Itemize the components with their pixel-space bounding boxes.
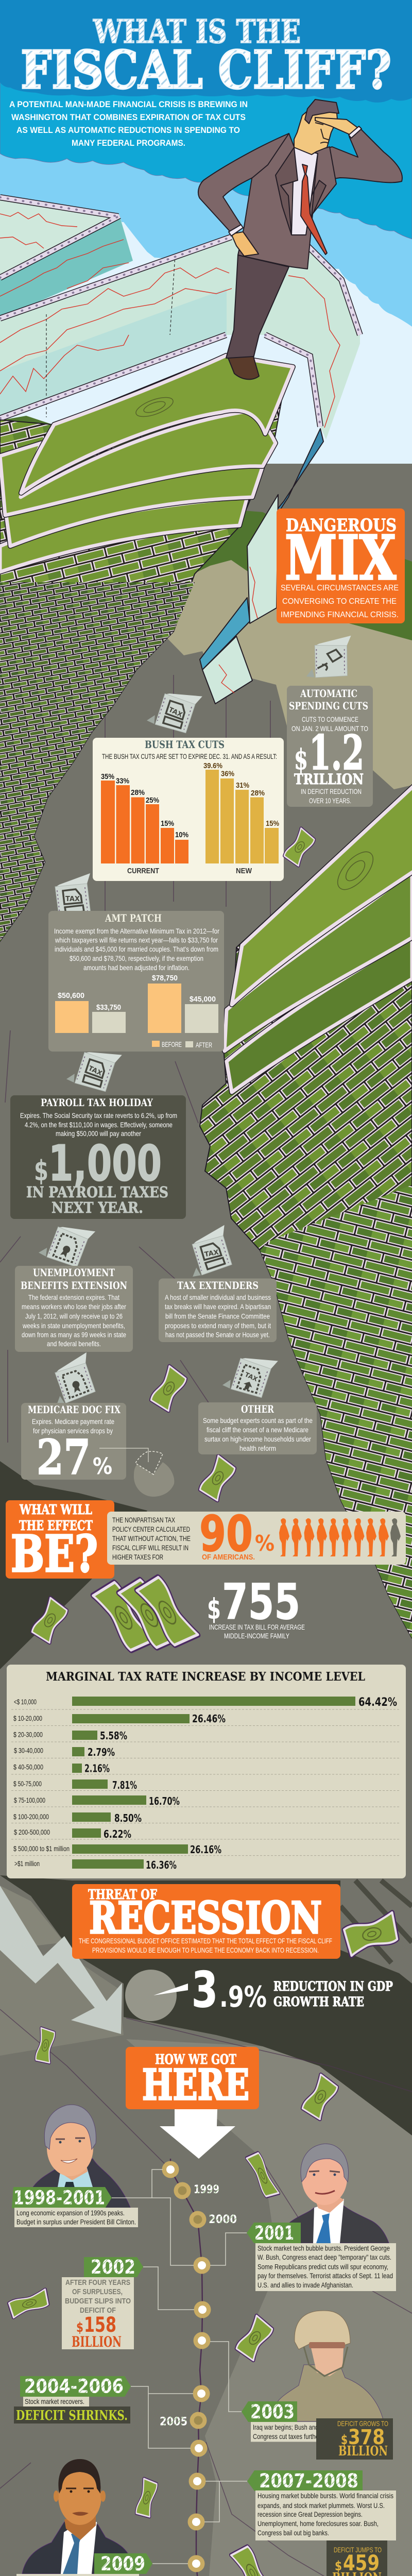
- panel: automatic spending cuts: SPENDING CUTS: [289, 700, 368, 712]
- legend: [152, 1040, 212, 1049]
- icon: tax paper 2: TAX: [65, 895, 80, 903]
- panel: automatic spending cuts: TRILLION: [294, 771, 364, 788]
- panel: automatic spending cuts: $: [294, 743, 308, 776]
- panel: medicare doc fix: 27: [37, 1429, 91, 1485]
- timeline entry: 2004-2006: Stock market recovers.: [25, 2397, 84, 2405]
- new rates labels: 31%: [236, 781, 249, 790]
- panel: unemployment benefits: down from as many as 99 weeks in state: [22, 1330, 126, 1338]
- sky: [0, 0, 412, 464]
- timeline entry: 1998-2001: Long economic expansion of 1990s peaks.: [16, 2209, 125, 2217]
- rate values: [84, 1696, 397, 1871]
- panel: dangerous mix: [277, 509, 405, 623]
- intro text: AS WELL AS AUTOMATIC REDUCTIONS IN SPENDING TO: [16, 125, 240, 135]
- current rates labels: 35%: [101, 772, 114, 781]
- new rates labels: 15%: [266, 819, 279, 828]
- panel: tax extenders: proposes to extend many of them, but it: [165, 1321, 271, 1330]
- panel: dangerous mix: SEVERAL CIRCUMSTANCES ARE: [281, 584, 399, 592]
- shielding hand: [315, 117, 358, 134]
- timeline entry: 2002: DEFICIT OF: [80, 2306, 116, 2315]
- panel: automatic spending cuts: ON JAN. 2 WILL AMOUNT TO: [291, 724, 368, 733]
- bars: [72, 1697, 355, 1869]
- illustration: businessman looking out: [198, 99, 402, 379]
- panel: marginal tax rate chart: MARGINAL TAX RATE INCREASE BY INCOME LEVEL: [46, 1670, 365, 1684]
- panel: medicare doc fix: for physician services drops by: [33, 1427, 113, 1435]
- AMT bar chart: $45,000: [190, 995, 216, 1004]
- timeline entry: 2003: Congress cut taxes further.: [253, 2432, 322, 2441]
- panel: 90 percent of americans: %: [255, 1531, 274, 1556]
- callout: 755 dollars: 755: [222, 1574, 300, 1631]
- axis labels: CURRENT: [127, 867, 159, 875]
- panel: payroll tax holiday: PAYROLL TAX HOLIDAY: [41, 1096, 153, 1109]
- panel: 90 percent of americans: THE NONPARTISAN TAX: [112, 1516, 176, 1524]
- panel: AMT patch: amounts had been adjusted for inflation.: [83, 963, 190, 972]
- callout: 755 dollars: $: [207, 1592, 221, 1625]
- panel: payroll tax holiday: $: [34, 1155, 48, 1187]
- timeline entry: 2007-2008: 459: [343, 2550, 380, 2575]
- panel: payroll tax holiday: IN PAYROLL TAXES: [26, 1183, 168, 1201]
- timeline entry: 2004-2006: DEFICIT SHRINKS.: [16, 2408, 128, 2424]
- timeline entry: 2007-2008: expands, and stock market plummets. Worst U.S.: [258, 2501, 385, 2510]
- new rates labels: [203, 761, 279, 828]
- icon: medal paper 1: [39, 1213, 96, 1272]
- panel: other: [198, 1402, 317, 1454]
- rate values: 16.36%: [146, 1859, 177, 1871]
- panel: tax extenders: [159, 1279, 277, 1342]
- current rates labels: 15%: [161, 819, 174, 828]
- dark rock upper region: [0, 1461, 147, 1669]
- panel: unemployment benefits: [15, 1266, 133, 1352]
- icon: other tax paper: [222, 1344, 279, 1402]
- panel: AMT patch: AMT PATCH: [105, 912, 162, 924]
- panel: tax extenders: A host of smaller individual and business: [165, 1293, 271, 1301]
- timeline entry: 2002: BUDGET SLIPS INTO: [65, 2297, 131, 2306]
- icon: tax paper 1: TAX: [167, 706, 183, 719]
- timeline entry: 2003: 2003: [250, 2401, 295, 2423]
- heading: what will the effect be: THE EFFECT: [19, 1518, 93, 1534]
- timeline entry: 2007-2008: $: [335, 2558, 342, 2574]
- heading: how we got here: HOW WE GOT: [155, 2052, 236, 2067]
- panel: unemployment benefits: weeks in state unemployment benefits,: [22, 1321, 125, 1330]
- current rates labels: 25%: [146, 796, 159, 805]
- legend: BEFORE: [162, 1040, 182, 1048]
- timeline entry: 2004-2006: 2004-2006: [24, 2375, 124, 2398]
- intro text: WASHINGTON THAT COMBINES EXPIRATION OF TAX CUTS: [11, 112, 246, 122]
- new rates labels: 36%: [221, 770, 234, 778]
- portrait: George W. Bush: [289, 2144, 389, 2243]
- green and tan hills: [0, 416, 412, 804]
- chart: 27 percent pie: [99, 1448, 174, 1497]
- panel: unemployment benefits: July 1, 2012, will only receive up to 26: [25, 1312, 123, 1320]
- current rates labels: [101, 772, 188, 839]
- portrait: soldier: [270, 2311, 384, 2421]
- income labels: [13, 1698, 70, 1868]
- icon: flying bill: [343, 1912, 401, 1956]
- income labels: $ 500,000 to $1 million: [13, 1844, 70, 1853]
- AMT bar chart: $33,750: [96, 1003, 121, 1012]
- income labels: $ 10-20,000: [13, 1714, 42, 1722]
- timeline medallions: [162, 2161, 232, 2576]
- panel: payroll tax holiday: 4.2%, on the first $110,100 in wages. Effectively, someone: [25, 1121, 173, 1129]
- timeline year labels: 2005: [160, 2415, 187, 2429]
- panel: bush tax cuts chart: BUSH TAX CUTS: [145, 738, 225, 751]
- timeline entry: 2007-2008: Unemployment, home foreclosures soar. Bush,: [258, 2519, 379, 2528]
- panel: tax extenders: TAX EXTENDERS: [177, 1279, 259, 1292]
- icon: tax paper 3: TAX: [87, 1064, 103, 1078]
- lapels: [276, 147, 326, 235]
- panel: threat of recession: THREAT OF: [88, 1887, 157, 1903]
- tie: [301, 164, 327, 255]
- rate values: 8.50%: [114, 1812, 142, 1824]
- current rates bars: [101, 781, 188, 863]
- rate values: 2.16%: [84, 1762, 110, 1774]
- heading: what will the effect be: [6, 1500, 114, 1583]
- panel: automatic spending cuts: AUTOMATIC: [300, 687, 357, 700]
- panel: payroll tax holiday: 1,000: [48, 1136, 162, 1192]
- timeline entry: 2003: [242, 2401, 393, 2460]
- panel: AMT patch: individuals and $45,000 for married couples. That's down from: [55, 945, 218, 953]
- timeline entry: 2001: U.S. and allies to invade Afghanistan.: [258, 2281, 353, 2289]
- timeline entry: 2002: $: [76, 2320, 83, 2335]
- intro text: MANY FEDERAL PROGRAMS.: [72, 138, 185, 148]
- cracks: [0, 675, 412, 2576]
- left arm: [198, 133, 289, 233]
- timeline entry: 2009: 2009: [100, 2553, 145, 2575]
- callout: 755 dollars: MIDDLE-INCOME FAMILY: [224, 1632, 290, 1640]
- title: WHAT IS THE: [93, 12, 301, 50]
- panel: 90 percent of americans: 90: [199, 1506, 253, 1563]
- illustration: stack of money: [0, 354, 293, 941]
- panel: medicare doc fix: %: [93, 1453, 112, 1480]
- panel: bush tax cuts chart: THE BUSH TAX CUTS ARE SET TO EXPIRE DEC. 31. AND AS A RESULT:: [102, 752, 277, 760]
- right arm: [322, 128, 402, 182]
- timeline entry: 2003: Iraq war begins; Bush and: [253, 2423, 318, 2431]
- panel: 90 percent of americans: POLICY CENTER CALCULATED: [112, 1525, 190, 1533]
- income labels: $ 20-30,000: [13, 1730, 43, 1738]
- panel: threat of recession: [72, 1884, 340, 1959]
- timeline entry: 2001: 2001: [254, 2222, 294, 2244]
- income labels: <$ 10,000: [14, 1698, 37, 1706]
- arrow: down to timeline: [160, 2109, 235, 2159]
- illustration: stock chart paper tape: [0, 196, 360, 704]
- panel: 90 percent of americans: OF AMERICANS.: [202, 1553, 255, 1562]
- timeline entry: 1998-2001: 1998-2001: [13, 2187, 105, 2209]
- axis labels: NEW: [236, 867, 252, 875]
- illustration: right money stack: [200, 785, 412, 1638]
- panel: 90 percent of americans: HIGHER TAXES FOR: [112, 1553, 163, 1561]
- heading: what will the effect be: BE?: [11, 1524, 98, 1583]
- panel: medicare doc fix: [21, 1403, 126, 1485]
- panel: medicare doc fix: MEDICARE DOC FIX: [28, 1403, 121, 1416]
- rate values: 5.58%: [100, 1730, 127, 1742]
- portrait: Bill Clinton: [31, 2105, 131, 2210]
- panel: dangerous mix: CONVERGING TO CREATE THE: [282, 597, 397, 606]
- chart: GDP pie with 3.9 percent: 3: [192, 1962, 218, 2019]
- shirt: [291, 147, 318, 235]
- icon: tax paper 1: [147, 680, 203, 738]
- chart: GDP pie with 3.9 percent: GROWTH RATE: [273, 1994, 364, 2009]
- timeline connectors: [112, 2170, 247, 2576]
- timeline entry: 2002: BILLION: [72, 2333, 122, 2350]
- AMT bar chart: $78,750: [152, 974, 178, 982]
- panel: unemployment benefits: BENEFITS EXTENSION: [21, 1279, 127, 1292]
- icon: small dollar bill: [282, 828, 317, 866]
- rate values: 26.46%: [192, 1713, 226, 1725]
- panel: other: surtax on high-income households under: [204, 1435, 311, 1443]
- panel: automatic spending cuts: IN DEFICIT REDUCTION: [301, 787, 362, 795]
- panel: unemployment benefits: The federal extension expires. That: [28, 1293, 119, 1301]
- callout: 755 dollars: [207, 1574, 305, 1640]
- income labels: $ 200-500,000: [14, 1828, 50, 1836]
- timeline entry: 2007-2008: recession since Great Depression begins.: [258, 2510, 363, 2518]
- timeline entry: 2003: $: [341, 2432, 348, 2448]
- panel: tax extenders: bill from the Senate Finance Committee: [165, 1312, 270, 1320]
- timeline year labels: 2000: [209, 2213, 237, 2226]
- panel: tax extenders: has not passed the Senate or House yet.: [165, 1330, 270, 1338]
- panel: other: fiscal cliff the onset of a new Medicare: [207, 1426, 308, 1434]
- income labels: $ 50-75,000: [13, 1780, 42, 1788]
- legend: AFTER: [196, 1041, 212, 1049]
- income labels: $ 75-100,000: [14, 1796, 45, 1804]
- timeline entry: 2007-2008: Congress bail out big banks.: [258, 2529, 329, 2537]
- new rates bars: [205, 770, 279, 863]
- panel: other: Some budget experts count as part of the: [203, 1416, 313, 1425]
- new rates labels: 28%: [251, 789, 265, 798]
- timeline year labels: 1999: [194, 2183, 219, 2196]
- title: [21, 12, 391, 100]
- timeline entry: 2007-2008: [247, 2470, 396, 2576]
- rate values: 64.42%: [358, 1696, 397, 1709]
- timeline entry: 2004-2006: [14, 2375, 131, 2424]
- timeline entry: 2007-2008: DEFICIT JUMPS TO: [334, 2546, 382, 2554]
- current rates labels: 33%: [116, 777, 129, 786]
- panel: bush tax cuts chart: [93, 738, 284, 881]
- panel: other: health reform: [239, 1444, 276, 1452]
- panel: marginal tax rate chart: [7, 1665, 406, 1878]
- panel: AMT patch: [48, 911, 224, 1052]
- panel: 90 percent of americans: FISCAL CLIFF WILL RESULT IN: [112, 1544, 188, 1552]
- timeline entry: 2001: [247, 2222, 396, 2291]
- panel: 90 percent of americans: [107, 1506, 406, 1565]
- timeline entry: 2002: [62, 2256, 143, 2350]
- rate values: 7.81%: [112, 1779, 137, 1791]
- icon: other tax paper: TAX: [244, 1371, 259, 1383]
- icon: tax paper 4: [185, 1225, 233, 1277]
- rate values: 6.22%: [104, 1828, 131, 1840]
- icon: large flying bills: [30, 1575, 198, 1655]
- arrow: falling lightning arrow: [0, 1886, 122, 2034]
- panel: dangerous mix: IMPENDING FINANCIAL CRISIS.: [281, 611, 399, 619]
- panel: AMT patch: which taxpayers will file returns next year—falls to $33,750 for: [55, 936, 218, 944]
- timeline entry: 2003: 378: [348, 2426, 385, 2449]
- income labels: $ 30-40,000: [14, 1747, 43, 1755]
- timeline entry: 2003: DEFICIT GROWS TO: [337, 2419, 388, 2428]
- panel: automatic spending cuts: CUTS TO COMMENCE: [302, 715, 358, 723]
- panel: unemployment benefits: means workers who lose their jobs after: [22, 1302, 126, 1311]
- panel: tax extenders: tax breaks will have expired. A bipartisan: [165, 1302, 271, 1311]
- grey cliff face: [0, 634, 412, 2576]
- timeline entry: 1998-2001: [12, 2187, 138, 2227]
- icon: flying bills group 1: [149, 1366, 238, 1501]
- panel: automatic spending cuts: OVER 10 YEARS.: [309, 796, 351, 805]
- panel: unemployment benefits: UNEMPLOYMENT: [33, 1266, 115, 1279]
- chart: GDP pie with 3.9 percent: .9%: [219, 1980, 267, 2014]
- neck and face: [294, 107, 337, 155]
- icon: tax paper 3: [66, 1038, 123, 1096]
- lower hand: [231, 232, 259, 256]
- panel: threat of recession: PROVISIONS WOULD BE ENOUGH TO PLUNGE THE ECONOMY BACK INTO RECESSION.: [92, 1946, 319, 1954]
- jacket: [238, 133, 336, 269]
- icon: tax paper 4: TAX: [204, 1249, 219, 1259]
- heading: how we got here: HERE: [142, 2061, 249, 2110]
- timeline year labels: [160, 2183, 237, 2429]
- income labels: $ 100-200,000: [13, 1812, 49, 1821]
- intro text: A POTENTIAL MAN-MADE FINANCIAL CRISIS IS BREWING IN: [9, 99, 248, 109]
- timeline entry: 2007-2008: 2007-2008: [259, 2470, 358, 2492]
- current rates labels: 28%: [131, 788, 145, 797]
- panel: payroll tax holiday: Expires. The Social Security tax rate reverts to 6.2%, up from: [20, 1111, 177, 1120]
- panel: payroll tax holiday: NEXT YEAR.: [52, 1199, 143, 1216]
- current rates labels: 10%: [175, 831, 188, 839]
- timeline entry: 2002: 158: [84, 2313, 116, 2337]
- timeline entry: 2002: AFTER FOUR YEARS: [65, 2278, 130, 2287]
- AMT bar chart: $50,600: [58, 991, 84, 1000]
- people pictogram: [279, 1518, 401, 1556]
- axis labels: [127, 867, 252, 875]
- income labels: $ 40-50,000: [13, 1763, 43, 1771]
- portrait: Barack Obama: [22, 2459, 131, 2574]
- AMT bar chart: [55, 974, 218, 1033]
- chart: GDP pie with 3.9 percent: [125, 1962, 393, 2021]
- new rates labels: 39.6%: [203, 761, 222, 770]
- timeline entry: 2002: 2002: [91, 2256, 135, 2278]
- panel: AMT patch: $50,600 and $78,750, respectively, if the exemption: [70, 954, 203, 962]
- rate values: 16.70%: [149, 1795, 180, 1807]
- rate values: 26.16%: [190, 1843, 221, 1856]
- rate values: 2.79%: [88, 1746, 115, 1758]
- panel: threat of recession: RECESSION: [89, 1892, 322, 1943]
- icon: medal paper 2: [47, 1352, 96, 1405]
- intro text: [9, 99, 248, 148]
- income labels: >$1 million: [14, 1859, 40, 1868]
- timeline entry: 1998-2001: Budget in surplus under President Bill Clinton.: [16, 2217, 136, 2226]
- panel: 90 percent of americans: THAT WITHOUT ACTION, THE: [112, 1534, 191, 1543]
- timeline entry: 2009: [16, 2553, 152, 2576]
- panel: other: OTHER: [241, 1403, 274, 1415]
- panel: AMT patch: Income exempt from the Alternative Minimum Tax in 2012—for: [54, 927, 219, 935]
- panel: automatic spending cuts: 1.2: [309, 725, 364, 781]
- heading: how we got here: [126, 2047, 259, 2110]
- callout: 755 dollars: INCREASE IN TAX BILL FOR AVERAGE: [209, 1623, 305, 1631]
- heading: what will the effect be: WHAT WILL: [19, 1502, 92, 1518]
- icons: flying bills timeline: [5, 2028, 340, 2576]
- icon: spending cuts paper: [306, 632, 352, 681]
- panel: payroll tax holiday: [10, 1095, 186, 1219]
- trousers and shoes: [226, 255, 289, 379]
- panel: automatic spending cuts: [287, 686, 373, 807]
- lighter slope: [126, 2039, 412, 2576]
- panel: payroll tax holiday: making $50,000 will pay another: [56, 1129, 141, 1138]
- panel: unemployment benefits: and federal benefits.: [47, 1340, 101, 1348]
- timeline entry: 2002: OF SURPLUSES,: [72, 2287, 123, 2296]
- timeline entry: 2003: BILLION: [338, 2444, 388, 2459]
- icon: tax paper 2: [50, 873, 91, 919]
- panel: medicare doc fix: Expires. Medicare payment rate: [32, 1417, 114, 1426]
